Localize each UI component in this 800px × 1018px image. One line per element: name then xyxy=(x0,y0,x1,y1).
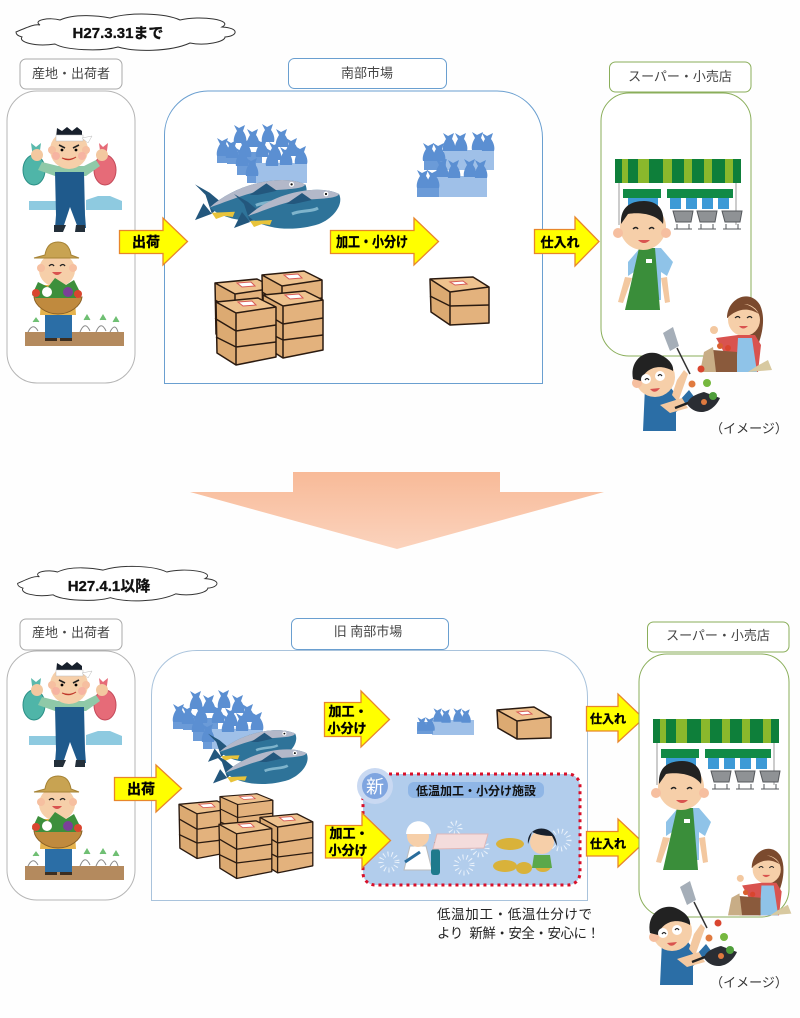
icon: tuna pair xyxy=(195,180,340,229)
icon: small bags of fish xyxy=(417,708,474,735)
big arrow down xyxy=(190,472,604,549)
panel: supermarket and retailers xyxy=(601,93,751,356)
arrow: processing and portioning: 加工・小分け xyxy=(336,234,408,250)
icon: shopper xyxy=(700,296,772,372)
note: image only: （イメージ） xyxy=(710,421,788,436)
icon: box stacks xyxy=(179,794,313,878)
icon: store with clerk xyxy=(613,159,742,310)
cloud heading: H27.4.1以降: H27.4.1以降 xyxy=(68,578,150,595)
cloud heading: H27.3.31まで: H27.3.31まで xyxy=(73,25,163,42)
panel: low-temperature processing facility xyxy=(357,768,580,885)
arrow: processing to market: 小分け xyxy=(327,721,367,736)
panel: former Nanbu market xyxy=(152,650,588,900)
icon: small box xyxy=(497,707,551,739)
cloud heading: H27.3.31まで xyxy=(16,14,235,50)
icon: worker with knife xyxy=(404,821,440,875)
icon: farmer xyxy=(25,776,124,880)
section: until H27.3.31 xyxy=(7,14,788,436)
icon: worker with black hair xyxy=(528,828,557,868)
label: supermarket and retailers xyxy=(610,62,751,92)
panel: supermarket and retailers xyxy=(639,654,789,917)
icon: fisherman xyxy=(23,662,122,767)
arrow: processing to facility: 小分け xyxy=(328,843,368,858)
section: from H27.4.1 xyxy=(7,566,791,990)
arrow: purchasing: 仕入れ xyxy=(590,711,626,726)
text: benefit note: 低温加工・低温仕分けで xyxy=(437,907,592,922)
arrow: processing to facility xyxy=(326,813,390,868)
icon: farmer xyxy=(25,242,124,346)
icon: small bags of fish xyxy=(417,132,494,197)
icon: tuna pair xyxy=(208,730,308,784)
label: former Nanbu market: 旧 南部市場 xyxy=(334,624,402,639)
label: Nanbu market xyxy=(288,58,446,88)
icon: store with clerk xyxy=(651,719,780,870)
icon: shopper xyxy=(728,849,791,915)
panel: producers xyxy=(7,651,135,900)
text: benefit note xyxy=(437,907,600,941)
arrow: purchasing from facility xyxy=(586,819,644,867)
icon: bags of fish xyxy=(217,124,307,183)
icon: fillets on trays xyxy=(433,834,488,849)
snow texture xyxy=(381,823,569,873)
arrow: processing to market: 加工・ xyxy=(328,704,368,719)
arrow: processing to market xyxy=(324,691,390,747)
icon: fisherman xyxy=(23,127,122,232)
label: supermarket and retailers xyxy=(648,622,789,652)
label: Nanbu market: 南部市場 xyxy=(341,66,393,80)
label: producers: 産地・出荷者 xyxy=(32,625,110,640)
arrow: shipping: 出荷 xyxy=(132,234,160,250)
label: producers: 産地・出荷者 xyxy=(32,66,110,81)
icon: portioned produce xyxy=(493,838,551,874)
arrow: purchasing xyxy=(586,694,644,742)
panel: producers xyxy=(7,91,135,383)
icon: cook xyxy=(649,881,737,985)
label: former Nanbu market xyxy=(292,618,448,650)
panel: Nanbu market xyxy=(164,91,542,384)
label: supermarket and retailers: スーパー・小売店 xyxy=(666,628,770,643)
icon: box stacks xyxy=(215,271,323,365)
icon: cook xyxy=(632,327,720,431)
label: supermarket and retailers: スーパー・小売店 xyxy=(628,69,732,84)
cloud heading: H27.4.1以降 xyxy=(18,566,217,601)
arrow: processing and portioning xyxy=(330,218,438,265)
arrow: shipping: 出荷 xyxy=(127,781,155,797)
note: image only: （イメージ） xyxy=(710,975,788,990)
arrow: processing to facility: 加工・ xyxy=(329,826,369,841)
arrow: shipping xyxy=(120,218,188,265)
arrow: purchasing xyxy=(534,217,599,266)
facility title: 低温加工・小分け施設 xyxy=(416,783,536,798)
text: benefit note: より 新鮮・安全・安心に！ xyxy=(437,926,600,941)
arrow: purchasing: 仕入れ xyxy=(540,235,580,250)
badge: new xyxy=(357,768,393,804)
icon: bags of fish xyxy=(173,690,263,749)
arrow: purchasing from facility: 仕入れ xyxy=(590,836,626,851)
arrow: shipping xyxy=(114,765,182,812)
badge: new: 新 xyxy=(366,777,384,797)
label: producers xyxy=(20,59,122,89)
icon: small box xyxy=(430,277,489,325)
label: producers xyxy=(20,619,122,650)
